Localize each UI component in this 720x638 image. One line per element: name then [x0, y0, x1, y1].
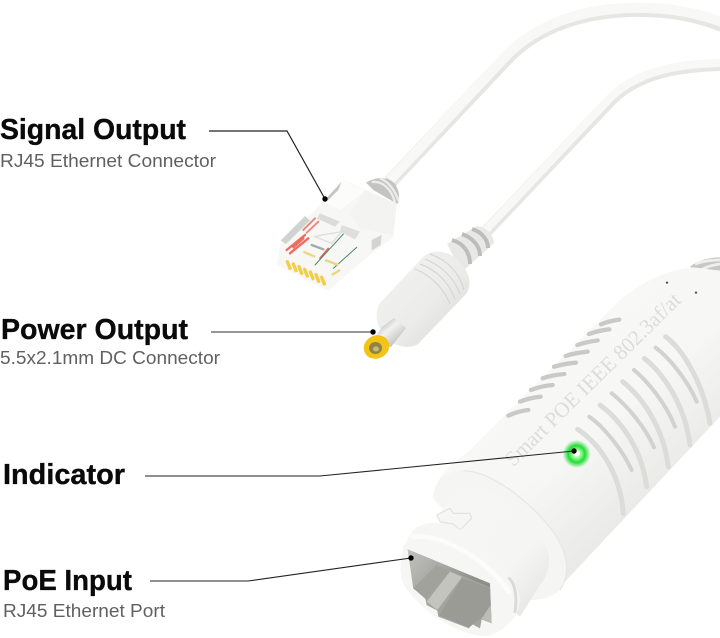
label: Power Output: 5.5x2.1mm DC Connector	[0, 348, 220, 368]
leader line: Indicator	[145, 448, 577, 476]
strain relief boot	[366, 178, 399, 204]
label: Indicator: Indicator	[3, 459, 125, 491]
label: Power Output	[0, 314, 220, 368]
flange ring	[433, 471, 567, 600]
metal pin	[372, 318, 406, 347]
embossed label: Smart POE IEEE 802.3af/at	[500, 288, 686, 471]
ribbed boot	[447, 226, 494, 272]
cable: power	[482, 63, 720, 236]
top-side vents	[508, 320, 619, 416]
moulded collar	[377, 251, 469, 347]
DC barrel connector	[360, 226, 494, 363]
PoE splitter body	[400, 257, 720, 636]
RJ45 connector	[277, 178, 399, 291]
cable: signal	[390, 8, 720, 182]
RJ45 port cavity	[408, 549, 492, 628]
side vents	[578, 337, 710, 513]
label: Power Output: Power Output	[1, 314, 188, 346]
label: PoE Input: PoE Input	[3, 565, 132, 597]
label: Signal Output: RJ45 Ethernet Connector	[0, 151, 216, 171]
gold contacts	[287, 262, 324, 284]
label: Signal Output: Signal Output	[0, 114, 186, 146]
leader line: Power Output	[211, 329, 376, 335]
clear plug housing	[277, 180, 397, 291]
label: PoE Input: RJ45 Ethernet Port	[3, 601, 165, 621]
yellow tip	[360, 331, 393, 363]
keyed notch	[437, 508, 472, 530]
label: PoE Input	[3, 565, 165, 621]
plug neck	[433, 486, 549, 617]
screw dots	[666, 281, 668, 284]
housing	[433, 267, 720, 600]
rear cable grip	[690, 257, 720, 273]
LED indicator	[563, 440, 591, 468]
wires	[287, 218, 357, 268]
clip	[509, 578, 516, 612]
port face	[400, 523, 519, 636]
label: Signal Output	[0, 114, 216, 171]
leader line: Signal Output	[209, 131, 328, 202]
leader line: PoE Input	[150, 555, 414, 581]
